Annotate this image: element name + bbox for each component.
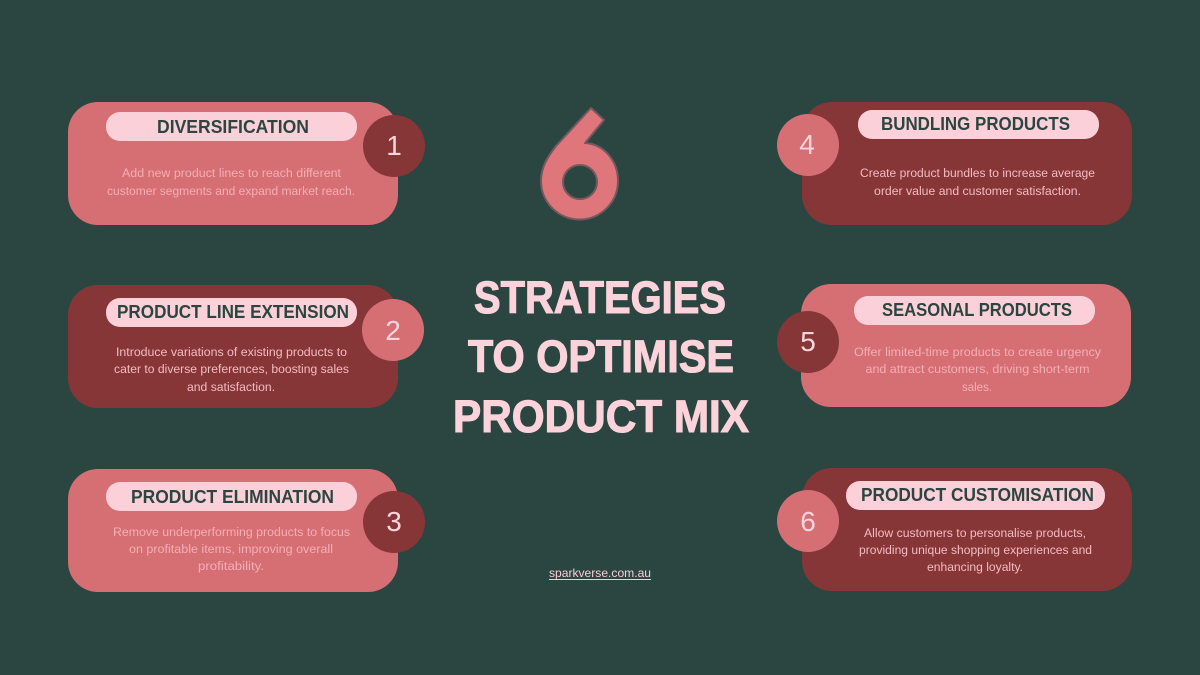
panel: bundling products: BUNDLING PRODUCTS (881, 114, 1070, 134)
panel: bundling products (777, 102, 1132, 225)
title: STRATEGIES (474, 272, 726, 323)
panel: product elimination: 3 (386, 506, 402, 537)
panel: product customisation (777, 468, 1132, 591)
panel: product line extension: cater to diverse preferences, boosting sales (114, 362, 349, 376)
icon: large numeral six (541, 108, 618, 220)
panel: bundling products: order value and customer satisfaction. (874, 184, 1081, 198)
title (453, 272, 749, 442)
panel: product customisation: providing unique shopping experiences and (859, 543, 1092, 557)
panel: product line extension: 2 (385, 315, 401, 346)
website link: sparkverse.com.au (549, 566, 651, 580)
panel: seasonal products: SEASONAL PRODUCTS (882, 300, 1072, 320)
panel: product elimination: on profitable items, improving overall (129, 542, 333, 556)
panel: product elimination: profitability. (198, 559, 264, 573)
panel: diversification: 1 (386, 130, 402, 161)
panel: diversification: customer segments and expand market reach. (107, 184, 355, 198)
panel: product customisation: Allow customers to personalise products, (864, 526, 1086, 540)
panel: seasonal products (777, 284, 1131, 407)
panel: bundling products: 4 (799, 129, 815, 160)
panel: product elimination: PRODUCT ELIMINATION (131, 487, 334, 507)
title: PRODUCT MIX (453, 391, 749, 442)
panel: seasonal products: Offer limited-time products to create urgency (854, 345, 1102, 359)
panel: product customisation: 6 (800, 506, 816, 537)
panel: product line extension: PRODUCT LINE EXTENSION (117, 302, 349, 322)
panel: seasonal products: 5 (800, 326, 816, 357)
panel: diversification: DIVERSIFICATION (157, 117, 309, 137)
panel: product customisation: PRODUCT CUSTOMISATION (861, 485, 1094, 505)
panel: bundling products: Create product bundles to increase average (860, 166, 1095, 180)
panel: product line extension: Introduce variations of existing products to (116, 345, 347, 359)
panel: diversification (68, 102, 425, 225)
panel: product customisation: enhancing loyalty. (927, 560, 1023, 574)
panel: product elimination: Remove underperforming products to focus (113, 525, 350, 539)
panel: diversification: Add new product lines to reach different (122, 166, 342, 180)
panel: product elimination (68, 469, 425, 592)
panel: seasonal products: sales. (962, 380, 992, 394)
panel: product line extension (68, 285, 424, 408)
panel: seasonal products: and attract customers, driving short-term (866, 362, 1090, 376)
panel: product line extension: and satisfaction. (187, 380, 275, 394)
title: TO OPTIMISE (468, 331, 734, 382)
